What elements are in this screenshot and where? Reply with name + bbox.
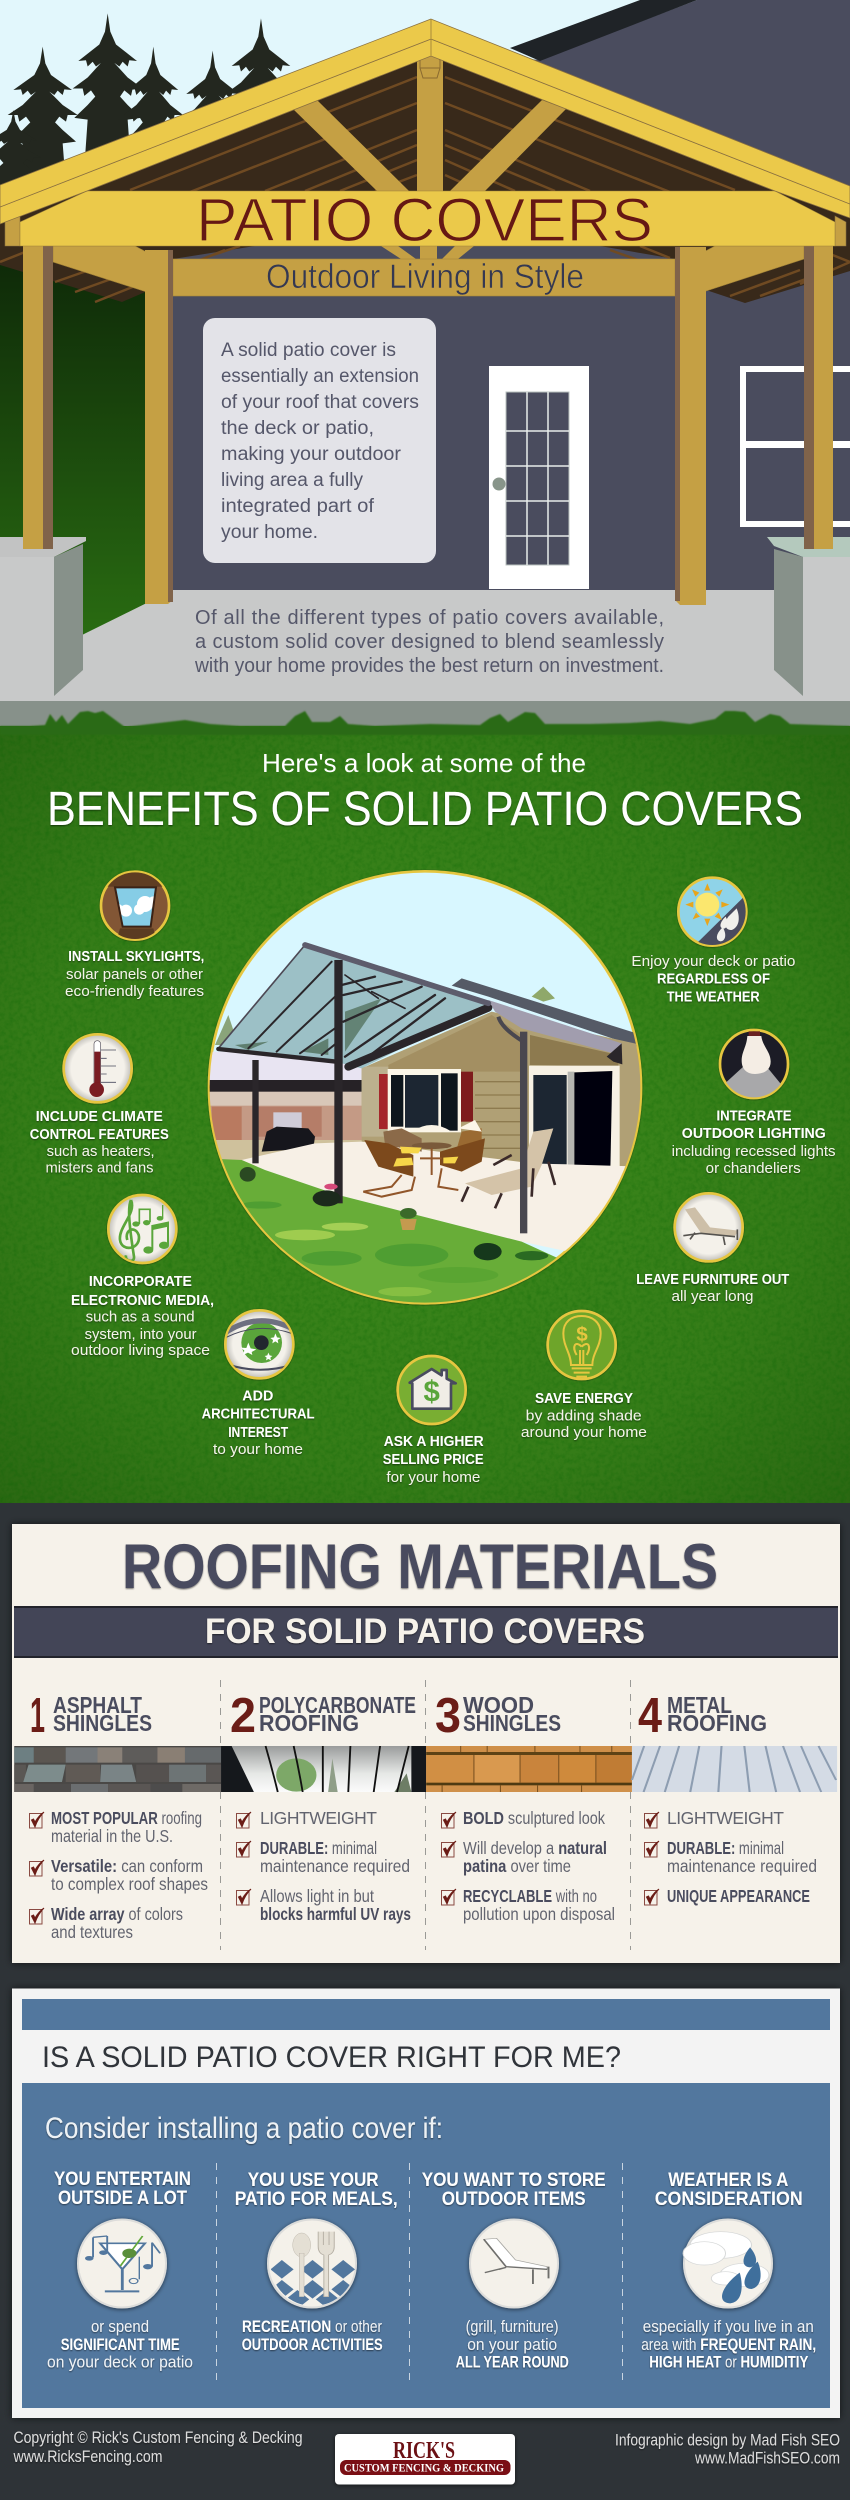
fence [205,1080,365,1167]
icon: martini with notes [78,2220,166,2308]
benefit: architectural interest [202,1310,315,1458]
heading: wood shingles: 3 [435,1689,461,1743]
text box: solid patio cover definition: integrated part of [221,496,375,517]
image: wood shingles [426,1746,632,1792]
heading: polycarbonate roofing [230,1689,416,1743]
plinth left [0,537,86,696]
bullet: maintenance required [667,1856,817,1876]
house back roof [452,978,637,1047]
text [641,2317,816,2372]
banner: for solid patio covers: FOR SOLID PATIO COVERS [205,1612,645,1651]
wood braces in gable [293,56,566,259]
house eave [488,1000,622,1056]
text: skylights: INSTALL SKYLIGHTS, [68,949,204,965]
benefit: leave furniture out [636,1193,789,1305]
text: (grill, furniture) [466,2317,559,2336]
ridge joint [430,19,432,56]
icon: lounge chair [470,2220,558,2308]
heading: asphalt shingles [30,1689,152,1743]
footer: copyright [13,2428,302,2466]
column: entertain [47,2168,193,2372]
house wall [173,0,850,700]
bullet [442,1838,607,1876]
window with shutters [379,1069,473,1132]
bullet: Will develop a natural [463,1838,607,1858]
footer: copyright: Copyright © Rick's Custom Fencing & Decking [14,2428,302,2447]
text: climate control: INCLUDE CLIMATE [36,1109,163,1125]
text: climate control: misters and fans [46,1160,154,1176]
heading: asphalt shingles: 1 [30,1689,45,1743]
text: electronic media [71,1274,214,1359]
left background lawn [0,240,150,650]
logo: Rick's Custom Fencing & Decking: CUSTOM FENCING & DECKING [344,2460,504,2474]
distant sky and trees [205,987,555,1085]
table and chairs [363,1120,485,1197]
text: electronic media: outdoor living space [71,1342,210,1359]
heading: metal roofing: METAL [667,1692,732,1718]
text: weather: Enjoy your deck or patio [631,953,795,970]
text box: solid patio cover definition: making your outdoor [221,444,402,465]
text box: solid patio cover definition [203,318,436,563]
column far right [804,246,833,549]
heading: metal roofing: 4 [638,1689,662,1743]
text: selling price: SELLING PRICE [383,1452,484,1468]
heading: YOU ENTERTAIN [54,2168,191,2190]
text: save energy [521,1391,647,1441]
text: climate control [30,1109,169,1176]
logo: Rick's Custom Fencing & Decking [335,2434,515,2484]
icon: pine trees [0,13,296,208]
text [47,2317,193,2372]
text box: solid patio cover definition: essentially an extension [221,366,419,387]
bullet [30,1856,208,1894]
text: electronic media: such as a sound [86,1308,195,1326]
text: best return on investment: with your home provides the best return on investment. [194,655,664,677]
text: weather [631,953,795,1006]
benefit: outdoor lighting [672,1030,836,1177]
bullet [442,1886,615,1924]
panel: roofing materials [12,1524,840,1963]
text: RECREATION or other [242,2317,382,2336]
dark upper roof line [510,0,697,61]
text: skylights: eco-friendly features [65,983,204,1000]
text [456,2317,569,2372]
text box: solid patio cover definition: A solid patio cover is [221,340,396,361]
benefit: climate control [30,1034,169,1176]
logo: Rick's Custom Fencing & Decking: RICK'S [393,2438,455,2464]
support posts left [252,960,343,1203]
heading: asphalt shingles: SHINGLES [53,1710,152,1736]
benefit: skylights [65,870,204,1000]
bullets: metal roofing [644,1808,817,1906]
sky [0,0,850,300]
bullet: pollution upon disposal [463,1904,615,1924]
bullet [30,1904,183,1942]
roof soffit [0,56,850,303]
image: asphalt shingles [14,1746,221,1792]
lawn [222,1159,557,1303]
heading: wood shingles [435,1689,561,1743]
gable lantern [420,56,440,78]
blue content background [22,2083,830,2408]
text: architectural interest: INTEREST [228,1425,288,1441]
text: climate control: such as heaters, [47,1143,155,1160]
cover frame [218,945,488,1067]
lower header beam [173,259,675,296]
icon: recessed light [713,1030,797,1103]
subtitle: Outdoor Living in Style [266,258,584,296]
benefit: selling price [383,1356,484,1486]
section intro: Here's a look at some of the [262,748,586,778]
door [489,366,589,589]
yellow title beam [20,191,835,246]
column: storage [422,2169,606,2372]
bullet: DURABLE: minimal [260,1838,377,1858]
heading: OUTSIDE A LOT [58,2187,187,2209]
text: or spend [91,2317,149,2336]
dividers [216,2163,622,2386]
text: architectural interest: ADD [242,1388,273,1404]
icon: thermometer [64,1034,132,1102]
glass cover [218,945,488,1068]
heading: asphalt shingles: ASPHALT [53,1692,142,1718]
text: on your patio [467,2335,557,2354]
icon: fork and spoon [268,2220,356,2309]
footer: design credit [615,2430,840,2468]
icon: sun and rain [678,878,752,950]
bullet [30,1808,202,1846]
bullet [644,1886,810,1906]
soffit rafters [0,77,850,302]
bullet: material in the U.S. [51,1826,173,1846]
icon: light bulb: $ [576,1323,588,1346]
end caps of the yellow beam [5,216,846,246]
icon: house with dollar: $ [424,1376,440,1409]
text: selling price: ASK A HIGHER [384,1434,484,1450]
text: architectural interest: ARCHITECTURAL [202,1406,315,1422]
text: best return on investment: Of all the different types of patio covers available, [195,607,664,629]
text: weather: THE WEATHER [667,990,760,1006]
text: save energy: SAVE ENERGY [535,1391,633,1407]
column far left [23,246,53,549]
text: electronic media: ELECTRONIC MEDIA, [71,1293,214,1309]
grill [262,1112,315,1152]
sliding door [529,1066,620,1172]
heading: CONSIDERATION [655,2188,803,2210]
text [242,2317,383,2354]
text: save energy: around your home [521,1424,647,1441]
image: metal roofing [632,1746,837,1792]
bullet: DURABLE: minimal [667,1838,784,1858]
heading: metal roofing [638,1689,767,1743]
grass background [0,711,850,1503]
heading: metal roofing: ROOFING [667,1710,767,1736]
text: outdoor lighting [672,1108,836,1177]
icon: eye [224,1310,295,1378]
text: architectural interest: to your home [213,1441,303,1458]
hero: patio structure [0,0,850,731]
shrubs and flowers [240,1167,502,1260]
heading: OUTDOOR ITEMS [442,2188,586,2210]
bullet: patina over time [463,1856,571,1876]
bullets: wood shingles [442,1808,615,1924]
text: selling price [383,1434,484,1486]
heading: polycarbonate roofing: 2 [230,1689,256,1743]
heading: PATIO FOR MEALS, [235,2188,398,2210]
footer: copyright: www.RicksFencing.com [13,2447,162,2466]
text: leave furniture out: all year long [672,1288,754,1305]
panel: is a solid patio cover right for me [12,1988,840,2418]
column dividers [220,1680,630,1950]
plinth right [767,537,850,696]
concrete patio floor [0,590,850,701]
text: outdoor lighting: OUTDOOR LIGHTING [682,1126,826,1142]
text: weather: REGARDLESS OF [657,972,770,988]
heading: YOU WANT TO STORE [422,2169,606,2191]
bullet [236,1886,411,1924]
roof fascia lower layer [0,39,850,224]
photo: patio cover on house [205,871,642,1312]
text: skylights: solar panels or other [66,966,203,983]
bullets: polycarbonate roofing [236,1808,411,1924]
column: weather [641,2169,816,2372]
text: electronic media: system, into your [85,1326,197,1343]
icon: music notes [108,1195,176,1263]
text: best return on investment [194,607,664,677]
heading: polycarbonate roofing: POLYCARBONATE [259,1692,416,1718]
bullets: asphalt shingles [30,1808,208,1942]
bullet: Versatile: can conform [51,1856,203,1876]
banner: for solid patio covers [14,1607,838,1657]
text: climate control: CONTROL FEATURES [30,1127,169,1143]
text: best return on investment: a custom solid cover designed to blend seamlessly [195,631,664,653]
bullet: BOLD sculptured look [463,1808,605,1828]
bullet: to complex roof shapes [51,1874,208,1894]
bullet: Allows light in but [260,1886,374,1906]
heading: roofing materials: ROOFING MATERIALS [122,1532,718,1602]
benefit: electronic media [71,1195,214,1359]
text box: solid patio cover definition: of your roof that covers [221,392,419,413]
bullet: LIGHTWEIGHT [667,1808,784,1828]
text: save energy: by adding shade [526,1408,642,1424]
patio deck [242,1142,642,1257]
text: outdoor lighting: or chandeliers [706,1160,801,1177]
subheading: Consider installing a patio cover if: [45,2112,443,2145]
text: skylights [65,949,204,1000]
icon: clouds and rain [683,2220,772,2308]
heading [54,2168,191,2209]
column: meals [235,2169,398,2354]
roof fascia upper layer [0,19,850,207]
lounge chair [462,1128,555,1208]
heading [422,2169,606,2210]
bullet: LIGHTWEIGHT [260,1808,377,1828]
side brackets [53,246,804,295]
text: ALL YEAR ROUND [456,2352,569,2372]
heading: question: IS A SOLID PATIO COVER RIGHT FOR ME? [42,2041,621,2074]
text: architectural interest [202,1388,315,1458]
column front right [675,247,706,605]
image: polycarbonate roofing [221,1746,426,1792]
text: especially if you live in an [643,2317,814,2336]
window [743,369,850,524]
text: OUTDOOR ACTIVITIES [242,2335,383,2354]
heading: YOU USE YOUR [248,2169,379,2191]
bullet: blocks harmful UV rays [260,1904,411,1924]
panel background [12,1988,840,2418]
text box: solid patio cover definition: the deck or patio, [221,418,374,439]
section: benefits on grass [0,711,850,1503]
house siding [362,1012,642,1202]
text: leave furniture out: LEAVE FURNITURE OUT [636,1272,789,1288]
heading: polycarbonate roofing: ROOFING [259,1710,359,1736]
text: HIGH HEAT or HUMIDITIY [649,2352,809,2372]
heading: wood shingles: SHINGLES [463,1710,561,1736]
heading [655,2169,803,2210]
top blue band [22,1999,830,2030]
support post right [498,1017,622,1233]
text: outdoor lighting: INTEGRATE [716,1108,792,1124]
heading: wood shingles: WOOD [463,1692,534,1718]
heading: WEATHER IS A [668,2169,788,2191]
text: outdoor lighting: including recessed lights [672,1143,836,1160]
bullet: RECYCLABLE with no [463,1886,597,1906]
heading [235,2169,398,2210]
benefit: weather [631,878,795,1006]
bullet [644,1838,817,1876]
bullet [236,1838,410,1876]
benefit: save energy [521,1311,647,1441]
text: on your deck or patio [47,2352,193,2372]
text: SIGNIFICANT TIME [61,2335,180,2354]
text: area with FREQUENT RAIN, [641,2335,816,2354]
column front left [145,250,173,604]
bullet: Wide array of colors [51,1904,183,1924]
title: PATIO COVERS [196,186,653,254]
icon: lounge chair [675,1193,743,1261]
bullet: and textures [51,1922,133,1942]
icon: skylight [100,870,170,940]
patio edge [0,701,850,731]
text: selling price: for your home [386,1469,480,1486]
text: leave furniture out [636,1272,789,1305]
text box: solid patio cover definition: your home. [221,522,318,543]
text: electronic media: INCORPORATE [89,1274,192,1290]
panel background [12,1524,840,1963]
bullet: MOST POPULAR roofing [51,1808,202,1828]
text box: solid patio cover definition: living area a fully [221,470,363,491]
bullet: maintenance required [260,1856,410,1876]
